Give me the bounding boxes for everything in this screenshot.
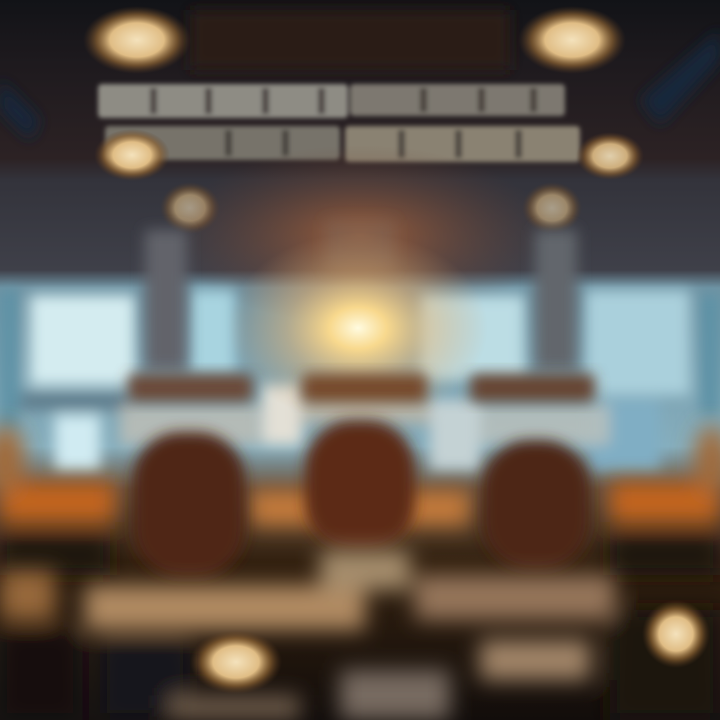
left chair (133, 432, 245, 577)
pillars (145, 220, 577, 370)
centre chair (305, 420, 415, 550)
icon: foreground lamp right (642, 600, 710, 668)
icon: foreground lamp left (190, 630, 282, 694)
icon: left lamp (83, 6, 191, 74)
warm upper glow (170, 145, 550, 325)
icon: right lamp (518, 6, 626, 74)
panel: foreground tables (0, 550, 720, 720)
ceiling lamps (83, 6, 626, 74)
horizontal beams (128, 374, 595, 402)
panel: orange desks (0, 425, 720, 575)
central glow (228, 233, 488, 423)
right chair (482, 440, 590, 570)
panel: windows (0, 290, 720, 470)
ceiling beams (0, 10, 720, 140)
small lamps under sign (94, 129, 644, 234)
chairs (133, 420, 590, 577)
title: illegible blurred sign (98, 84, 580, 162)
